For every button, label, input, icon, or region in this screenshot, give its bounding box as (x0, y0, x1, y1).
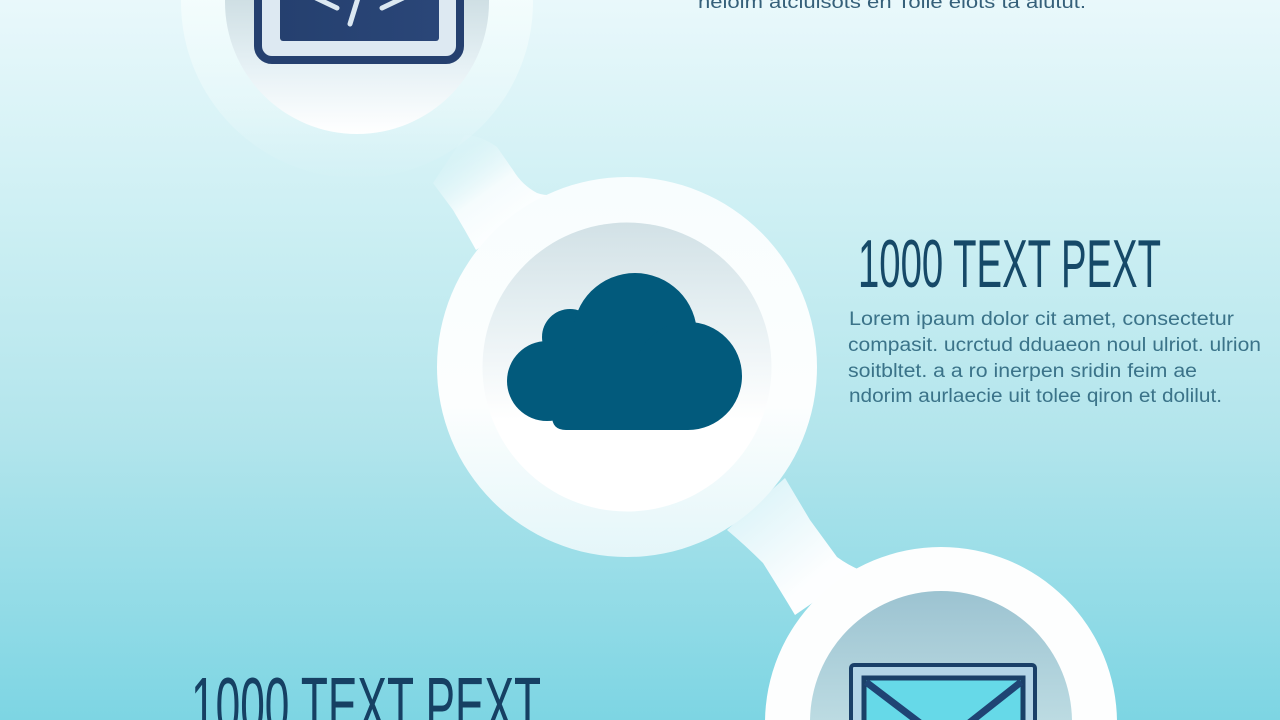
middle circle inner disc (482, 222, 772, 512)
body text: middle: compasit. ucrctud dduaeon noul ulriot. ulrion (848, 335, 1261, 356)
icon: cloud (507, 273, 742, 430)
icon: code monitor (258, 0, 460, 60)
body text: middle (848, 309, 1261, 407)
node: bottom circle (765, 547, 1117, 720)
connector: middle to bottom (727, 478, 860, 615)
body text: middle: ndorim aurlaecie uit tolee qiron et dolilut. (849, 386, 1222, 407)
text block: middle description (848, 226, 1261, 407)
top circle inner disc (225, 0, 489, 134)
middle circle outer ring (437, 177, 817, 557)
connector: top to middle (433, 135, 560, 250)
bottom circle outer ring (765, 547, 1117, 720)
icon: envelope (851, 665, 1035, 720)
top circle outer ring (181, 0, 533, 178)
node: middle circle (437, 177, 817, 557)
node: top circle (181, 0, 533, 178)
body text: middle: soitbltet. a a ro inerpen sridin feim ae (848, 361, 1197, 382)
body text: middle: Lorem ipaum dolor cit amet, consectetur (849, 309, 1235, 330)
bottom circle inner disc (810, 591, 1072, 720)
